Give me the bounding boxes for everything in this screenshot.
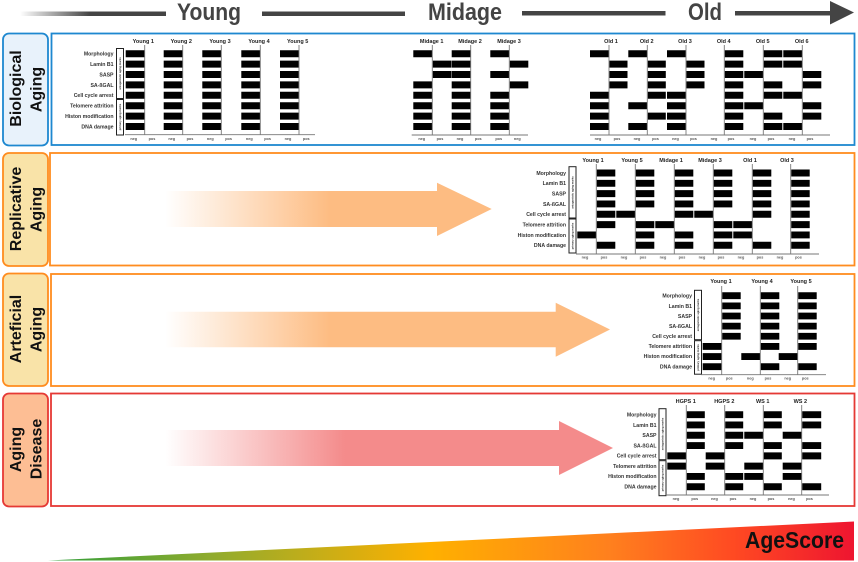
row labels: Histon modification [644,354,692,360]
column: Midage 1: pos [437,137,443,141]
column: Old 4: neg [711,137,718,141]
row labels: DNA damage [624,484,657,490]
column: Old 4: Old 4 [717,39,732,45]
column: Young 4 [741,279,779,380]
row labels: SA-ßGAL [90,83,114,89]
column: Young 2 [164,39,193,141]
column: Young 1: neg [582,256,589,260]
row labels: SA-ßGAL [669,324,693,330]
row labels: Telomere attrition [613,464,656,470]
column: Young 5: pos [640,256,646,260]
column: Young 1: Young 1 [582,158,604,164]
row labels: Histon modification [518,233,566,239]
column: Midage 1: neg [418,137,426,141]
column: Young 5: neg [621,256,628,260]
arrowhead [830,1,854,24]
column: Midage 3: neg [699,256,706,260]
row labels: SASP [642,433,657,439]
column: Young 4: Young 4 [751,279,774,285]
column: Old 3: neg [672,137,680,141]
baseline [125,134,315,136]
row labels: Histon modification [608,474,656,480]
row labels: Telomere attrition [649,344,692,350]
column: Old 5: Old 5 [756,39,770,45]
row labels: Telomere attrition [523,222,566,228]
timeline arrow header [20,0,854,26]
column: WS 2: WS 2 [794,399,807,405]
marker group boxes: antagonistic aging marks [118,57,122,90]
column: Young 5: Young 5 [790,279,812,285]
column: Young 1: neg [708,376,716,380]
baseline [412,134,528,136]
label: Biological Aging: Aging [28,67,46,112]
column: Old 4: pos [728,137,734,141]
column: Old 3: Old 3 [678,39,692,45]
column: Young 5: pos [802,376,809,380]
label: Biological Aging: Biological [8,50,25,127]
column: Midage 3: Midage 3 [497,39,521,45]
label: Replicative Aging: Aging [28,187,46,232]
column: Young 3: neg [207,137,214,141]
arrow: replicative [165,183,492,236]
marker group boxes: primary aging marks [118,103,122,130]
column: HGPS 2 [706,399,743,501]
column: Old 6: neg [789,137,796,141]
row labels: Morphology [84,52,114,58]
column: Young 5 [280,39,310,141]
row labels: Morphology [627,412,657,418]
panel frame [50,153,854,266]
row labels: SA-ßGAL [543,202,567,208]
chart: biological aging young [65,39,315,141]
column: HGPS 1: HGPS 1 [676,399,696,405]
column: Young 4: pos [765,376,771,380]
column: Young 4: Young 4 [248,39,271,45]
row labels: Cell cycle arrest [617,454,657,460]
column: Midage 3: neg [514,137,521,141]
column: WS 2: pos [806,497,813,501]
column: Midage 1 [413,39,451,141]
column: Young 5 [779,279,817,380]
column: Midage 2: Midage 2 [458,39,482,45]
column: Midage 1: Midage 1 [659,158,683,164]
column: Young 3: pos [225,137,232,141]
column: Old 1: pos [614,137,620,141]
row labels: Histon modification [65,114,114,120]
marker group boxes [569,167,576,253]
label: Arteficial Aging [3,274,48,386]
panel frame [51,394,854,506]
marker group boxes: antagonistic aging marks [660,417,664,450]
row labels: Cell cycle arrest [526,212,566,218]
row labels: SA-ßGAL [633,444,657,450]
column: Midage 3: Midage 3 [698,158,722,164]
column: Young 1 [126,39,155,141]
column: WS 2: neg [788,497,796,501]
column: Old 3: pos [690,137,697,141]
wedge [48,522,854,560]
marker group boxes [659,409,666,496]
column: Old 1: neg [738,256,745,260]
row labels: Lamin B1 [90,62,114,68]
column: Old 1: Old 1 [604,39,618,45]
column: Old 6: pos [807,137,813,141]
column: Midage 1 [655,158,693,260]
column: Midage 3 [694,158,732,260]
column: Old 6: Old 6 [795,39,809,45]
label: Replicative Aging: Replicative [8,167,25,251]
marker group boxes [116,48,124,135]
chart: biological aging old [590,39,830,141]
column: Young 5: neg [285,137,292,141]
baseline [666,494,829,496]
column: Young 4: neg [246,137,253,141]
marker group boxes: antagonistic aging marks [696,298,700,331]
column: Old 2: Old 2 [640,39,654,45]
column: Old 3: neg [777,256,784,260]
column: Young 5: Young 5 [621,158,643,164]
column: Young 2: Young 2 [171,39,192,45]
row labels [518,171,567,249]
column: Old 3: Old 3 [780,158,794,164]
marker group boxes: primary aging marks [570,222,574,249]
column: Young 1: pos [726,376,733,380]
chart: aging disease [608,399,829,501]
marker group boxes: antagonistic aging marks [570,176,574,209]
column: Young 2: neg [168,137,176,141]
column: Old 1: neg [595,137,602,141]
column: Old 3 [667,39,704,141]
marker group boxes: primary aging marks [696,344,700,371]
label: Replicative Aging [3,153,48,266]
column: WS 1: WS 1 [756,399,769,405]
column: HGPS 1: neg [673,497,680,501]
column: WS 1: pos [768,497,774,501]
column: Young 5 [616,158,654,260]
column: Old 4 [711,39,743,141]
column: Midage 1: neg [660,256,667,260]
label: Aging Disease: Aging [8,427,25,472]
column: Midage 3 [490,39,528,141]
column: Old 1: pos [757,256,763,260]
column: Young 4: pos [264,137,271,141]
column: Old 5: pos [768,137,774,141]
column: HGPS 1 [667,399,705,501]
column: Young 5: pos [303,137,310,141]
arrow: arteficial [165,303,610,357]
row labels: Lamin B1 [633,423,657,429]
row labels: Telomere attrition [70,104,114,110]
row labels: DNA damage [534,243,566,249]
label: Aging Disease [3,394,48,506]
column: Midage 2: pos [475,137,482,141]
column: Young 3 [202,39,232,141]
chart: biological aging midage [412,39,528,141]
column: Young 4 [241,39,271,141]
row labels: Lamin B1 [669,304,692,310]
column: Young 1: Young 1 [710,279,732,285]
row labels: Cell cycle arrest [74,93,114,99]
column: Young 1: Young 1 [133,39,154,45]
baseline [576,253,819,255]
column: Midage 3: pos [495,137,502,141]
column: Young 1 [703,279,741,380]
column: Midage 1: pos [679,256,685,260]
label: Arteficial Aging: Aging [28,307,46,352]
row labels: Morphology [662,294,692,300]
column: Young 3: Young 3 [209,39,231,45]
column: Young 1: neg [130,137,138,141]
column: Old 3: pos [795,256,802,260]
column: Old 3 [777,158,810,260]
panel: Arteficial Aging [3,274,854,386]
column: WS 2 [783,399,821,501]
column: Midage 3: pos [718,256,724,260]
column: Midage 1: Midage 1 [420,39,443,45]
row labels [608,412,657,490]
label: AgeScore: AgeScore [745,527,844,553]
panel: Replicative Aging [3,153,854,266]
label: Arteficial Aging: Arteficial [8,295,25,363]
panel: Aging Disease [3,394,854,506]
column: Young 5: Young 5 [287,39,308,45]
row labels: SASP [552,192,567,198]
row labels: DNA damage [81,124,114,130]
column: Old 1: Old 1 [743,158,757,164]
row labels: Lamin B1 [543,181,566,187]
column: Young 1: pos [601,256,607,260]
panel frame [51,274,854,386]
column: HGPS 2: neg [711,497,719,501]
column: Young 1 [577,158,615,260]
AgeScore gradient wedge [48,522,854,560]
column: Young 4: neg [747,376,754,380]
row labels: SASP [99,72,114,78]
column: HGPS 1: pos [691,497,698,501]
column: Young 5: neg [784,376,792,380]
panel: Biological Aging [3,34,854,146]
chart: arteficial aging [644,279,826,380]
column: Midage 2 [452,39,482,141]
column: Old 1 [590,39,628,141]
label: Biological Aging [3,34,48,146]
marker group boxes: primary aging marks [660,464,664,491]
column: WS 1 [744,399,782,501]
column: Young 2: pos [187,137,193,141]
row labels: Morphology [536,171,566,177]
row labels [644,294,693,370]
column: Young 1: pos [149,137,155,141]
column: Old 2 [628,39,666,141]
column: Old 1 [733,158,771,260]
row labels: SASP [678,314,693,320]
column: Old 5 [744,39,782,141]
marker group boxes [694,290,702,374]
row labels: DNA damage [660,364,692,370]
column: WS 1: neg [750,497,757,501]
column: Old 6 [783,39,821,141]
row labels: Cell cycle arrest [652,334,692,340]
column: Old 2: neg [634,137,641,141]
baseline [701,374,826,376]
baseline [590,134,830,136]
column: HGPS 2: HGPS 2 [714,399,734,405]
column: HGPS 2: pos [730,497,736,501]
column: Midage 2: neg [457,137,464,141]
timeline line segments [20,11,831,16]
label: Aging Disease: Disease [28,419,46,479]
row labels [65,52,114,130]
chart: replicative aging [518,158,819,260]
panel frame [52,34,854,145]
arrow: disease [165,421,613,475]
column: Old 2: pos [652,137,659,141]
column: Old 5: neg [750,137,757,141]
